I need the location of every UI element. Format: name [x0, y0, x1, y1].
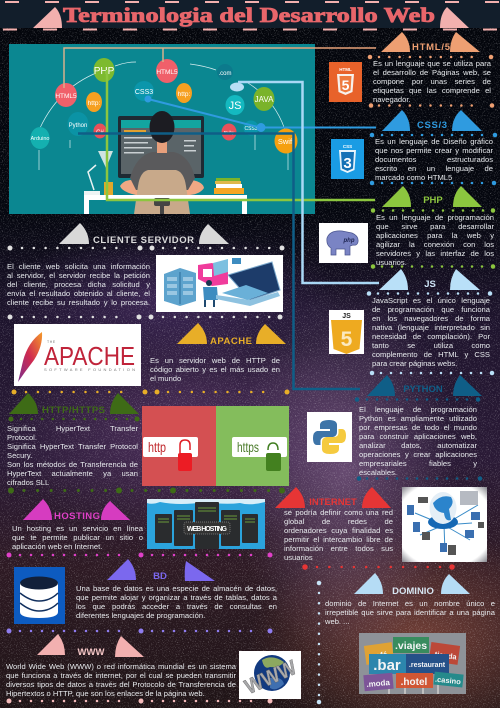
text: BD description: diferentes lenguajes de programación. [76, 611, 205, 620]
icon: CSS3 logo [331, 139, 364, 179]
text: JS description: necesidad de compilación). Por [372, 332, 490, 341]
text: cliente servidor description: El cliente web solicita una información [7, 262, 150, 270]
text: PHP description: usuarios. [376, 258, 407, 267]
bubbles: http: [88, 100, 101, 107]
bubbles: CSS3 [244, 126, 258, 132]
text: HTTP description: Secury. [7, 451, 32, 460]
text: PYTHON description: empresariales fiables y [359, 459, 477, 468]
icon: HTML5 logo: 5 [342, 77, 350, 93]
connector: HTML/5 [64, 48, 376, 88]
text: BD description [76, 584, 277, 620]
icon: HTML5 logo: HTML [339, 67, 352, 72]
text: HTTP description [7, 424, 138, 487]
text: BD description: Una base de datos es una especie de almacén de datos, [76, 584, 277, 592]
bubbles: Python [69, 123, 87, 129]
text: HTTP description: Significa HyperText Transfer [7, 424, 138, 432]
image: Apache logo: SOFTWARE FOUNDATION [44, 367, 135, 372]
text: DOMINIO description: web. ... [325, 617, 349, 626]
text: WWW description: diversos tipos de datos a través del Protocolo de Transferencia de [6, 680, 236, 689]
text: WWW description [6, 662, 236, 698]
image: Apache logo [14, 324, 141, 386]
connector: JS [238, 82, 379, 283]
panel: CLIENTE SERVIDOR [7, 223, 284, 320]
text: INTERNET description: global de redes de [284, 517, 393, 526]
image: domain signs [359, 633, 466, 694]
text: PYTHON description [359, 404, 477, 477]
text: HTML/5 description: navegador. [373, 95, 411, 104]
text: HTML/5 description [373, 59, 491, 104]
panel: BD [6, 559, 277, 634]
image: http and https locks: http [148, 439, 166, 455]
text: WWW description: Hipertextos o HTTP, que son los enlaces de la página web. [6, 689, 205, 698]
connector: CSS/3 [146, 96, 376, 131]
bubbles [30, 58, 298, 154]
text: PYTHON description: para construir aplicaciones web, [359, 432, 477, 441]
panel: WWW [6, 634, 301, 704]
icon: Python logo [307, 412, 352, 462]
text: hosting description: que te permite publicar un sitio o [12, 533, 143, 542]
panel: CLIENTE SERVIDOR: CLIENTE SERVIDOR [93, 235, 194, 246]
image: http and https locks: https [237, 439, 259, 455]
image: domain signs: .viajes [395, 640, 427, 652]
text: HTTP description: HyperText actualmente ya usan [7, 469, 138, 478]
icon: database [14, 567, 65, 624]
text: PYTHON description: analizar datos, automatizar [359, 441, 477, 450]
icon: JS logo [329, 310, 364, 354]
image: domain signs: .hotel [401, 677, 428, 688]
text: hosting description: aplicación web en Internet. [12, 542, 102, 551]
image: globe network [402, 487, 487, 562]
text: WWW description: World Wide Web (WWW) o red informática mundial es un sistema [6, 662, 236, 670]
text: PYTHON description: operaciones y crear aplicaciones [359, 450, 477, 459]
text: PHP description: agilizar la conexión con los [376, 240, 494, 249]
panel: HTML/5: HTML/5 [412, 42, 451, 53]
text: INTERNET description [284, 508, 393, 562]
text: hosting description: Un hosting es un servicio en línea [12, 524, 143, 532]
icon: CSS3 logo: CSS [343, 144, 352, 149]
bubbles: .com [218, 71, 232, 77]
image: web hosting servers [147, 499, 265, 549]
text: cliente servidor description [7, 262, 150, 307]
text: INTERNET description: se podría definir como una red [284, 508, 393, 516]
text: PHP description: aplicaciones para la web y [376, 231, 494, 240]
panel: WWW: WWW [78, 647, 104, 658]
bubbles: JAVA [255, 95, 274, 104]
connector: PYTHON [78, 134, 360, 389]
text: BD description: que permite alojar y organizar a través de tablas, datos a [76, 593, 277, 602]
panel: PHP: PHP [423, 195, 443, 206]
image: Apache logo: THE [47, 340, 56, 344]
text: JS description: JavaScript es el único lenguaje [372, 296, 490, 304]
text: HTML/5 description: compone por unas series de [373, 77, 491, 86]
text: HTTP description: Significa HyperText Transfer Protocol [7, 442, 138, 451]
icon: JS logo: JS [342, 313, 351, 320]
text: INTERNET description: ordenadores cuya finalidad es [284, 526, 393, 535]
text: PYTHON description: escalables. [359, 468, 397, 477]
panel: HOSTING [6, 499, 272, 558]
panel: DOMINIO: DOMINIO [392, 586, 434, 597]
panel: APACHE: APACHE [210, 336, 252, 347]
text: DOMINIO description: irrepetible que sirve para identificar a una página [325, 608, 495, 617]
text: Apache description: código abierto y es el más usado en [150, 365, 280, 374]
text: cliente servidor description: del cliente, procesa dicha solicitud y [7, 280, 150, 289]
panel: CSS/3: CSS/3 [417, 120, 447, 131]
image: http and https locks [142, 406, 289, 486]
panel: PHP [319, 186, 496, 269]
text: JS description: para crear páginas webs. [372, 359, 457, 368]
panel: DOMINIO [316, 573, 495, 704]
title banner [0, 0, 500, 30]
image: web hosting servers: WEB HOSTING [187, 526, 228, 533]
text: CSS/3 description: documentos estructurados [375, 155, 493, 164]
text: Apache description: Es un servidor web de HTTP de [150, 356, 280, 364]
text: DOMINIO description: dominio de Internet es un nombre único e [325, 598, 495, 608]
panel: APACHE [12, 323, 290, 394]
text: CSS/3 description: que nos permite crear y modificar [375, 146, 493, 155]
icon: PHP elephant: php [342, 238, 355, 244]
icon: JS logo: 5 [341, 328, 353, 351]
text: JS description: complemento de HTML y CSS [372, 350, 490, 359]
icon: HTML5 logo [329, 62, 362, 102]
text: PHP description: servidores y las interfaz de los [376, 249, 494, 258]
text: PHP description: que sirve para desarrollar [376, 222, 494, 231]
image: domain signs: .tienda [432, 649, 458, 662]
bubbles: HTML5 [55, 93, 77, 100]
image: domain signs: .casino [435, 675, 462, 686]
text: PYTHON description: Python es ampliamente utilizado [359, 414, 477, 423]
text: Apache description [150, 356, 280, 383]
hero illustration: developer at desk with technology bubbles [9, 44, 315, 214]
text: INTERNET description: usuarios [284, 553, 313, 562]
text: CSS/3 description: marcado como HTML5 [375, 173, 452, 182]
panel: INTERNET [275, 487, 487, 570]
text: HTTP description: cifrados SLL [7, 478, 49, 487]
bubbles: http: [178, 91, 191, 98]
bubbles: HTML5 [156, 69, 178, 76]
text: cliente servidor description: envía el resultado obtenido al cliente, el [7, 289, 150, 298]
text: CSS/3 description: Es un lenguaje de Diseño gráfico [375, 137, 493, 146]
text: JS description: de programación que funciona [372, 305, 490, 314]
panel: JS: JS [424, 279, 436, 290]
text: CSS/3 description [375, 137, 493, 182]
connector: PHP [107, 70, 375, 200]
text: cliente servidor description: cliente recibe su resultado y lo procesa. [7, 298, 150, 307]
text: HTML/5 description: etiquetas que las comprende el [373, 86, 491, 95]
text: WWW description: que funciona a través de internet, por el cual se pueden transmitir [6, 671, 236, 680]
text: BD description: los que podrás acceder a través de consultas en [76, 602, 277, 611]
panel: JS [329, 269, 494, 376]
icon: CSS3 logo: 3 [343, 155, 352, 172]
title banner: Terminologia del Desarrollo Web [63, 3, 435, 27]
text: PHP description [376, 212, 494, 267]
text: JS description: nativa (lenguaje interpretado sin [372, 323, 490, 332]
text: JS description: en los navegadores de forma [372, 314, 490, 323]
text: CSS/3 description: escrito en un lenguaje de [375, 164, 493, 173]
panel: HTML/5 [329, 32, 494, 108]
text: DOMINIO description [325, 598, 495, 626]
bubbles: Swift [278, 137, 295, 146]
text: JS description: tanto se utiliza como [372, 341, 490, 350]
image: client server illustration [156, 255, 283, 312]
text: INTERNET description: permitir el intercambio libre de [284, 535, 393, 544]
panel: PYTHON [307, 375, 482, 481]
text: JS description [372, 296, 490, 368]
text: INTERNET description: información entre todos sus [284, 544, 393, 553]
icon: PHP elephant [319, 223, 368, 263]
text: hosting description [12, 524, 143, 551]
text: PYTHON description: El lenguaje de programación [359, 404, 477, 414]
panel: HOSTING: HOSTING [54, 511, 100, 522]
text: HTTP description: Protocol. [7, 433, 37, 442]
bubbles: Arduino [31, 136, 49, 142]
bubbles: C# [96, 130, 104, 136]
panel: HTTP/HTTPS: HTTP/HTTPS [42, 405, 105, 416]
panel: CSS/3 [331, 110, 498, 186]
text: HTML/5 description: Es un lenguaje que se utiliza para [373, 59, 491, 68]
panel: INTERNET: INTERNET [309, 497, 357, 508]
image: domain signs: .restaurant [409, 662, 446, 669]
text: PYTHON description: por empresas de todo el mundo [359, 423, 477, 432]
image: WWW globe: WWW [241, 656, 300, 699]
text: cliente servidor description: al servidor, el servidor recibe la petición [7, 271, 150, 280]
image: domain signs: café [371, 650, 388, 661]
text: HTML/5 description: el desarrollo de Páginas web, se [373, 68, 491, 77]
text: Apache description: el mundo [150, 374, 181, 383]
bubbles: Ruby [224, 130, 235, 135]
heading decor [381, 32, 480, 52]
bubbles: JS [229, 100, 241, 112]
bubbles: CSS3 [135, 89, 153, 96]
panel: HTTP/HTTPS [7, 393, 289, 494]
image: domain signs: .moda [366, 678, 391, 689]
bubbles: PHP [94, 66, 115, 77]
text: PHP description: Es un lenguaje de programación [376, 212, 494, 222]
panel: BD: BD [153, 571, 167, 582]
text: HTTP description: Son los métodos de Transferencia de [7, 460, 138, 469]
image: domain signs: .bar [373, 657, 401, 674]
panel: PYTHON: PYTHON [403, 384, 443, 395]
image: Apache logo: APACHE [44, 341, 135, 371]
